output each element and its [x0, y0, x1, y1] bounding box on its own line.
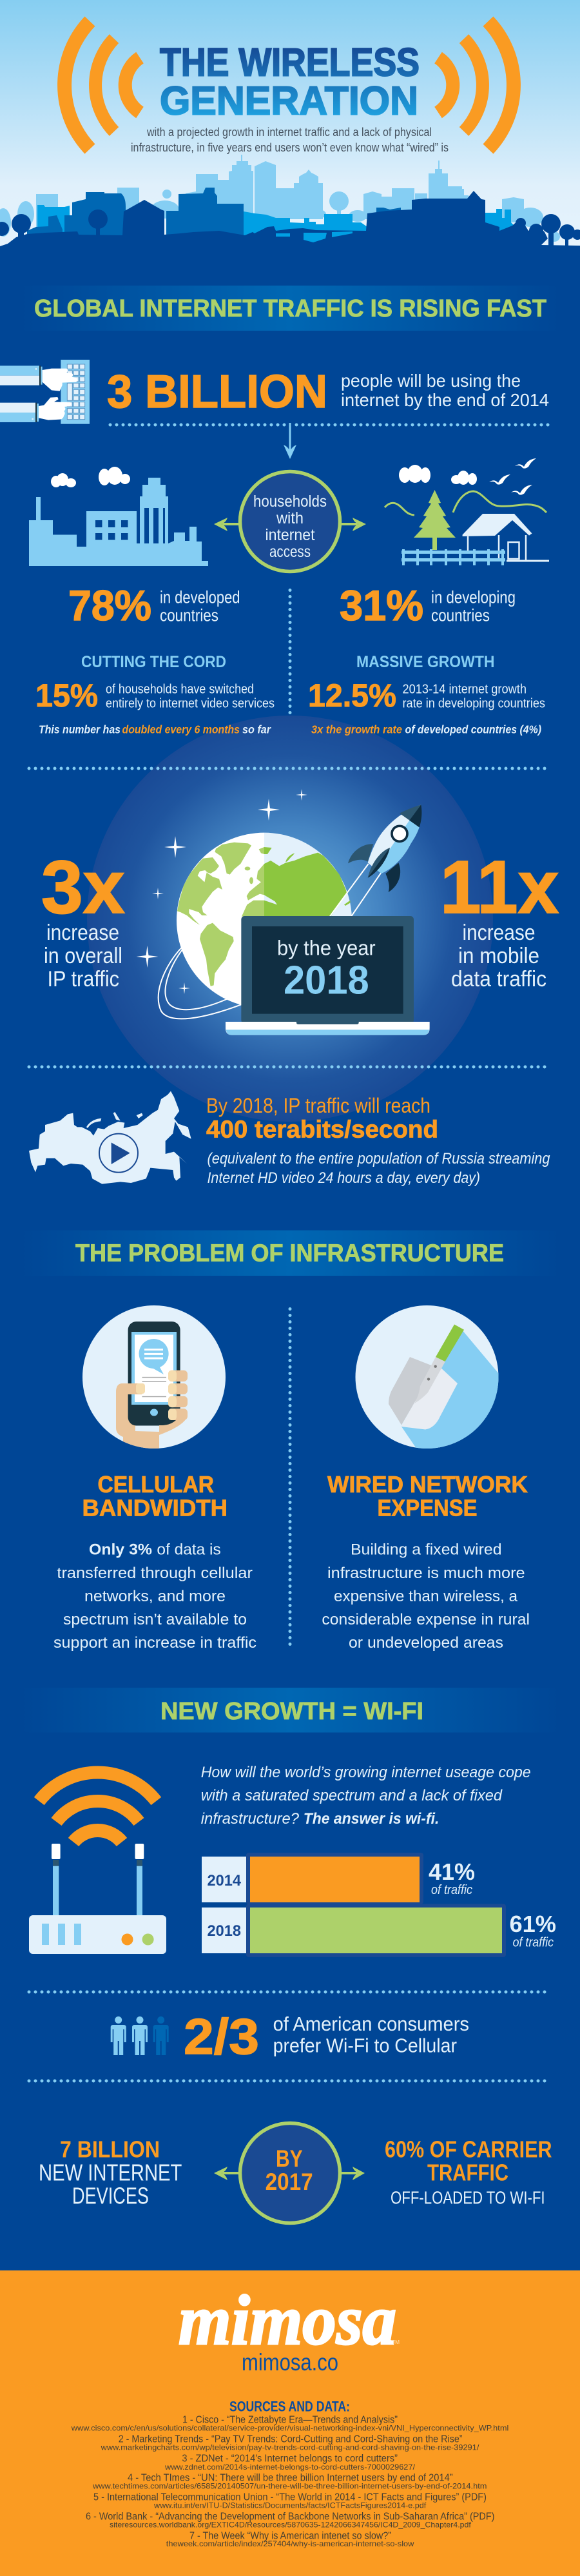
heading: THE PROBLEM OF INFRASTRUCTURE [75, 1240, 504, 1267]
stat: 3x overall IP traffic: IP traffic [48, 967, 119, 991]
divider dots [289, 1309, 291, 1648]
icon: rural house and tree [385, 490, 549, 565]
stat: 11x mobile data traffic [440, 845, 559, 991]
icon: phone in hand [82, 1305, 226, 1457]
stat: 11x mobile data traffic: increase [463, 921, 535, 945]
text: 400 terabits per second: Internet HD video 24 hours a day, every day) [208, 1169, 480, 1187]
panel: cutting the cord: of households have switched [106, 682, 254, 696]
text: how will usage cope: with a saturated spectrum and a lack of fixed [201, 1787, 503, 1804]
panel: wired network expense: expensive than wireless, a [334, 1588, 518, 1605]
bar 2018: of traffic [513, 1936, 554, 1950]
icon: hands typing on keyboard [0, 360, 90, 424]
title [160, 40, 420, 124]
bar 2014: of traffic [431, 1883, 472, 1897]
arrow: to developing [341, 518, 366, 531]
stat: 78 percent developed: in developed [160, 588, 240, 607]
sources list: 1 - Cisco - “The Zettabyte Era—Trends and Analysis” [182, 2415, 398, 2425]
stat: 3 billion [107, 366, 549, 418]
sources list: www.zdnet.com/2014s-internet-belongs-to-cord-cutters-7000029627/ [164, 2463, 416, 2472]
heading: GLOBAL INTERNET TRAFFIC IS RISING FAST [34, 295, 546, 322]
stat: 2/3 of American consumers: of American consumers [273, 2013, 469, 2035]
logo: mimosa [179, 2281, 396, 2359]
stat: 7 billion devices [39, 2136, 182, 2209]
title: GENERATION [160, 79, 418, 124]
circle: by 2017: BY [276, 2145, 303, 2172]
sources list: 3 - ZDNet - “2014's Internet belongs to cord cutters” [182, 2453, 398, 2464]
stat: 7 billion devices: NEW INTERNET [39, 2160, 182, 2186]
divider dots [29, 2080, 551, 2082]
section band: wi-fi [19, 1688, 561, 1733]
divider dots [110, 423, 548, 427]
heading: NEW GROWTH = WI-FI [160, 1698, 423, 1725]
subtitle [131, 126, 449, 154]
stat: 7 billion devices: 7 BILLION [60, 2136, 160, 2163]
stat: 3x overall IP traffic: in overall [44, 944, 122, 968]
panel: massive growth: 12.5% [308, 678, 396, 714]
laptop screen text [277, 937, 376, 1003]
text: 400 terabits per second: 400 terabits/second [206, 1117, 438, 1144]
stat: 31 percent developing: in developing [431, 588, 516, 607]
panel: wired network expense: WIRED NETWORK [327, 1471, 528, 1498]
panel: wired network expense [322, 1471, 530, 1652]
panel: wired network expense: Building a fixed wired [351, 1541, 501, 1559]
icon: right clouds [399, 465, 477, 485]
stat: 2/3 of American consumers [184, 2008, 469, 2065]
bar 2018 [202, 1904, 556, 1957]
panel: massive growth: of developed countries (4%) [405, 723, 541, 736]
stat: 3 billion: 3 BILLION [107, 366, 327, 418]
sources list: 5 - International Telecommunication Union - “The World in 2014 - ICT Facts and Figures” (PDF) [93, 2492, 487, 2503]
panel: wired network expense: EXPENSE [378, 1494, 477, 1521]
panel: wired network expense: infrastructure is much more [327, 1565, 525, 1582]
stat: 60 percent of carrier traffic [385, 2136, 552, 2207]
stat: 3 billion: internet by the end of 2014 [341, 390, 549, 410]
stat: 78 percent developed: 78% [68, 581, 151, 629]
stat: 2/3 of American consumers: prefer Wi-Fi to Cellular [273, 2034, 457, 2056]
rocket [348, 805, 421, 892]
bar 2018: 2018 [208, 1922, 241, 1940]
stat: 31 percent developing: 31% [340, 581, 423, 629]
stat: 3 billion: people will be using the [341, 371, 521, 391]
panel: cellular bandwidth: CELLULAR [98, 1471, 214, 1498]
band background [19, 1688, 561, 1733]
bar 2014: 2014 [208, 1872, 242, 1889]
website: mimosa.co [242, 2349, 338, 2376]
panel: cutting the cord: CUTTING THE CORD [81, 653, 226, 671]
sources list: siteresources.worldbank.org/EXTIC4D/Resources/5870635-1242066347456/IC4D_2009_Chapter4.pdf [110, 2521, 471, 2530]
laptop screen text: 2018 [284, 959, 369, 1003]
panel: massive growth: 3x the growth rate [311, 723, 402, 736]
circle: households with internet access: households [253, 493, 327, 511]
arrow: to developed [214, 518, 238, 531]
divider dots [29, 767, 551, 770]
sources list: www.itu.int/en/ITU-D/Statistics/Documents/facts/ICTFactsFigures2014-e.pdf [153, 2501, 427, 2510]
rocket trails [330, 864, 382, 917]
panel: cellular bandwidth: transferred through cellular [57, 1565, 253, 1582]
sources list [71, 2415, 508, 2548]
stat: 60 percent of carrier traffic: OFF-LOADED TO WI-FI [391, 2188, 545, 2207]
section band: infrastructure [19, 1230, 561, 1276]
stat: 78 percent developed [68, 581, 240, 629]
stat: 3x overall IP traffic [41, 845, 125, 991]
panel: cutting the cord: doubled every 6 months [122, 723, 240, 736]
panel: massive growth [308, 653, 545, 736]
sources list: 7 - The Week “Why is American intenet so slow?” [189, 2530, 391, 2541]
sources list: 6 - World Bank - “Advancing the Development of Backbone Networks in Sub-Saharan Africa” (PDF) [86, 2512, 495, 2522]
bar 2014: 41% [429, 1859, 475, 1885]
sources list: www.marketingcharts.com/wp/television/pay-tv-trends-cord-cutting-and-cord-shaving-on-the-rise-39291/ [101, 2443, 479, 2452]
sources list: www.cisco.com/c/en/us/solutions/collateral/service-provider/visual-networking-index-vni/VNI_Hyperconnectivity_WP.html [71, 2424, 508, 2433]
band background [19, 286, 561, 331]
icon: shovel [356, 1305, 499, 1449]
city skyline [0, 155, 580, 258]
icon: developed city [29, 478, 208, 566]
subtitle: with a projected growth in internet traffic and a lack of physical [146, 126, 432, 139]
panel: cutting the cord: 15% [35, 678, 98, 714]
stat: 60 percent of carrier traffic: 60% OF CARRIER [385, 2136, 552, 2163]
panel: massive growth: MASSIVE GROWTH [356, 653, 495, 671]
globe [177, 833, 264, 1008]
sources list: 2 - Marketing Trends - “Pay TV Trends: Cord-Cutting and Cord-Shaving on the Rise” [119, 2434, 463, 2445]
stat: 31 percent developing [340, 581, 516, 629]
divider dots [29, 1065, 551, 1069]
section band: global traffic [19, 286, 561, 331]
panel: cellular bandwidth: support an increase in traffic [53, 1634, 256, 1652]
sources heading: SOURCES AND DATA: [229, 2399, 350, 2415]
panel: footer [0, 2270, 580, 2576]
sources list: 4 - Tech TImes - “UN: There will be three billion Internet users by end of 2014” [128, 2473, 453, 2484]
bar chart: wi-fi share of traffic [202, 1853, 556, 1957]
icon: left signal arcs [64, 21, 140, 149]
sources list: www.techtimes.com/articles/6585/20140507/un-there-will-be-three-billion-internet-users-by-end-of-2014.htm [92, 2482, 487, 2491]
stat: 60 percent of carrier traffic: TRAFFIC [427, 2160, 508, 2186]
panel: wired network expense: considerable expense in rural [322, 1611, 530, 1628]
band background [19, 1230, 561, 1276]
stat: 3x overall IP traffic: increase [46, 921, 119, 945]
panel: cutting the cord [35, 653, 275, 736]
logo: TM [392, 2339, 400, 2345]
icon: stars [137, 789, 307, 994]
text: 400 terabits per second: By 2018, IP traffic will reach [206, 1094, 430, 1117]
sky gradient [0, 0, 580, 248]
text: how will usage cope: infrastructure? [201, 1810, 300, 1828]
panel: wired network expense: or undeveloped areas [349, 1634, 503, 1652]
stat: 11x mobile data traffic: in mobile [458, 944, 539, 968]
glow behind globe [87, 716, 493, 1122]
divider dots [29, 1991, 551, 1993]
panel: massive growth: 2013-14 internet growth [402, 682, 527, 696]
stat: 2/3 of American consumers: 2/3 [184, 2008, 259, 2065]
icon: left clouds [51, 467, 130, 487]
text: how will usage cope: How will the world’s growing internet useage cope [201, 1764, 531, 1781]
bar 2018: 61% [509, 1911, 556, 1937]
stat: 7 billion devices: DEVICES [72, 2183, 149, 2209]
panel: cellular bandwidth: spectrum isn’t available to [63, 1611, 247, 1628]
arrow: down to households [284, 423, 296, 459]
stat: 11x mobile data traffic: data traffic [451, 967, 546, 991]
text: how will usage cope: The answer is wi-fi. [304, 1810, 439, 1828]
icon: three people [111, 2016, 169, 2055]
laptop [241, 916, 414, 1024]
icon: Russia map with play button [29, 1091, 191, 1184]
panel: massive growth: rate in developing countries [402, 697, 545, 711]
orbit rings [159, 948, 241, 1019]
panel: cellular bandwidth: BANDWIDTH [82, 1494, 227, 1521]
circle: households with internet access: internet [266, 526, 315, 544]
icon: wi-fi router [29, 1773, 166, 1954]
circle: by 2017 [240, 2123, 340, 2223]
panel: cutting the cord: so far [242, 723, 271, 736]
circle: households with internet access: with [276, 509, 304, 527]
panel: cutting the cord: This number has [39, 723, 121, 736]
circle: by 2017: 2017 [266, 2169, 313, 2195]
title: THE WIRELESS [160, 40, 420, 84]
stat: 3x overall IP traffic: 3x [41, 845, 125, 929]
text: 400 terabits per second [206, 1094, 550, 1187]
stat: 78 percent developed: countries [160, 606, 218, 625]
panel: header [0, 0, 580, 258]
panel: cellular bandwidth: Only 3% [89, 1541, 152, 1559]
icon: right signal arcs [438, 21, 514, 149]
panel: cutting the cord: entirely to internet video services [106, 697, 275, 711]
panel: cellular bandwidth: of data is [157, 1541, 221, 1559]
divider dots [289, 590, 291, 752]
text: 400 terabits per second: (equivalent to the entire population of Russia streaming [208, 1150, 550, 1167]
footer background [0, 2270, 580, 2576]
panel: cellular bandwidth: networks, and more [84, 1588, 226, 1605]
circle: households with internet access [240, 472, 340, 571]
circle: households with internet access: access [269, 543, 311, 561]
stat: 31 percent developing: countries [431, 606, 490, 625]
laptop screen text: by the year [277, 937, 376, 960]
subtitle: infrastructure, in five years end users won’t even know what “wired” is [131, 141, 449, 154]
bar 2014 [202, 1853, 475, 1904]
icon: globe, orbit, rocket [159, 805, 430, 1035]
text: how will usage cope [201, 1764, 531, 1828]
panel: cellular bandwidth [53, 1471, 256, 1652]
icon: birds [489, 458, 536, 495]
sources list: theweek.com/article/index/257404/why-is-american-internet-so-slow [166, 2539, 414, 2548]
arrow: to 60 percent [341, 2167, 365, 2180]
arrow: to 7 billion [214, 2167, 238, 2180]
stat: 11x mobile data traffic: 11x [440, 845, 559, 929]
